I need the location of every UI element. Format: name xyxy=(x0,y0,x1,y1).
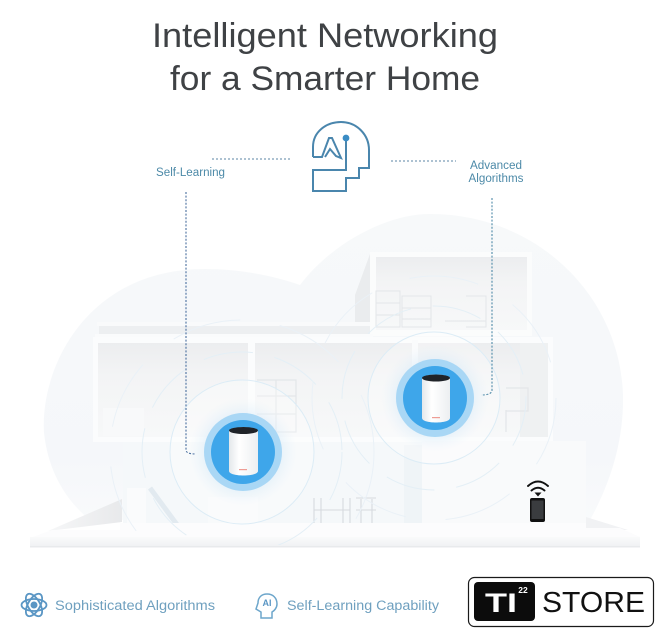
dotted connector: top right xyxy=(391,160,456,162)
dotted connector: top left xyxy=(212,158,290,160)
label: Advanced Algorithms xyxy=(468,160,524,185)
background cloud xyxy=(44,214,623,520)
label: Self-Learning: Self-Learning xyxy=(156,167,225,179)
router: upper xyxy=(381,344,489,452)
icon: AI head small xyxy=(256,594,277,618)
house illustration xyxy=(30,252,640,548)
legend text: sophisticated algorithms: Sophisticated Algorithms xyxy=(55,598,215,613)
logo: TI22 STORE: STORE xyxy=(542,587,645,619)
logo: TI22 STORE xyxy=(468,578,654,626)
router: lower xyxy=(189,398,297,506)
upper room xyxy=(355,252,532,336)
icon: atom xyxy=(22,591,46,619)
logo: TI22 STORE: TI xyxy=(485,588,517,618)
label: Advanced Algorithms: Advanced xyxy=(470,160,522,172)
middle floor xyxy=(93,337,553,442)
title: for a Smarter Home xyxy=(170,60,480,98)
lower floor xyxy=(123,442,422,526)
dotted connector: right vertical xyxy=(481,198,492,395)
roof strip xyxy=(95,322,373,339)
icon: AI head xyxy=(313,122,369,191)
wifi signal rings xyxy=(110,280,556,545)
icon: phone with wifi xyxy=(528,482,548,522)
right garage block xyxy=(422,441,586,525)
icon: AI head small: AI xyxy=(262,598,272,608)
legend text: self-learning capability: Self-Learning Capability xyxy=(287,598,439,613)
title: Intelligent Networking xyxy=(152,17,498,55)
label: Advanced Algorithms: Algorithms xyxy=(468,173,524,185)
title xyxy=(152,17,498,98)
dotted connector: left vertical xyxy=(186,192,196,454)
logo: TI22 STORE: 22 xyxy=(518,585,528,595)
base slab xyxy=(30,499,640,548)
